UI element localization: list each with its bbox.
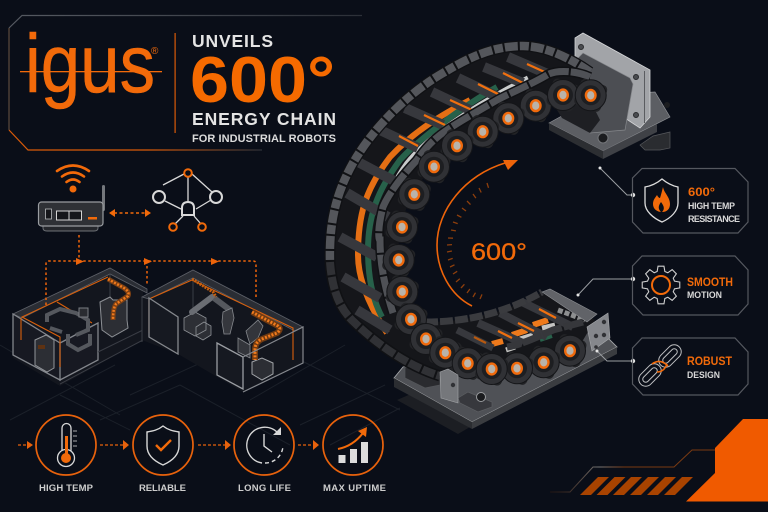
- corner accent: [550, 419, 768, 502]
- machine: right chain: [252, 312, 280, 360]
- panel: robust design: [632, 338, 748, 395]
- crossbar stripes: [399, 64, 556, 343]
- benefit: max uptime: MAX UPTIME: [323, 483, 386, 494]
- machine: robot cell: [47, 309, 90, 350]
- floor grid: [0, 345, 400, 445]
- panel text: ROBUST: [687, 354, 733, 368]
- header frame: [9, 16, 362, 150]
- connectors: [576, 166, 635, 363]
- panel text: RESISTANCE: [688, 214, 740, 224]
- circuit line: [550, 450, 715, 492]
- machine: robot arm one: [184, 312, 211, 340]
- side plates: [381, 77, 609, 387]
- benefit: high temp: HIGH TEMP: [39, 483, 94, 494]
- icon: network: [153, 169, 222, 231]
- icon: chain link: [636, 342, 684, 389]
- benefit: max uptime: [323, 415, 386, 494]
- igus logo: igus: [25, 17, 155, 110]
- gauge arc: [437, 160, 518, 306]
- benefits row: [18, 415, 386, 494]
- arrows: network distribution: [46, 235, 256, 305]
- icon: gear: [642, 266, 680, 304]
- headline: [190, 31, 336, 145]
- gauge ticks: [447, 183, 488, 299]
- benefit: long life: LONG LIFE: [238, 483, 291, 494]
- machine: gripper: [222, 308, 234, 334]
- chain end block: [542, 289, 610, 351]
- room: right: [142, 270, 303, 392]
- panel text: HIGH TEMP: [688, 201, 735, 211]
- panel text: DESIGN: [687, 370, 720, 381]
- header panel: [9, 16, 362, 150]
- panel text: [687, 275, 733, 301]
- rotation gauge: [437, 160, 527, 306]
- panel text: [687, 354, 733, 381]
- inner rim: [379, 71, 590, 347]
- headline: ENERGY CHAIN: [192, 109, 336, 129]
- machine: robot arm two: [238, 320, 263, 358]
- orange block: [686, 419, 768, 502]
- icon: wifi: [57, 166, 89, 192]
- icon: router: [38, 185, 105, 231]
- chain body: [330, 46, 595, 376]
- headline: UNVEILS: [192, 31, 273, 51]
- outer rail: [330, 46, 590, 376]
- igus logo: ®: [151, 46, 159, 57]
- benefit: reliable: RELIABLE: [139, 483, 186, 494]
- headline: 600°: [190, 43, 335, 116]
- arrow: router to network: [109, 209, 151, 217]
- factory floor plan: [13, 268, 303, 392]
- room: left: [13, 268, 147, 386]
- gauge label: 600°: [471, 239, 527, 266]
- benefit: reliable: [133, 415, 193, 494]
- header divider: [174, 33, 176, 133]
- panel text: 600°: [688, 185, 715, 199]
- arrows: benefits flow: [18, 440, 319, 450]
- panel text: MOTION: [687, 290, 722, 301]
- cables: [358, 78, 585, 350]
- panel: smooth motion: [632, 256, 748, 315]
- headline: FOR INDUSTRIAL ROBOTS: [192, 133, 336, 145]
- panel text: SMOOTH: [687, 275, 733, 289]
- icon: shield with flame: [645, 179, 678, 222]
- upright bracket: [440, 369, 492, 412]
- machine: robot with chain: [100, 297, 128, 337]
- hazard stripes: [580, 477, 693, 495]
- bottom bracket: [394, 320, 617, 434]
- top bracket: [549, 33, 670, 159]
- benefit: high temp: [36, 415, 96, 494]
- panel text: [688, 185, 740, 224]
- machine: cabinet: [35, 335, 54, 372]
- crossbars: [340, 57, 573, 348]
- energy chain: [330, 46, 610, 412]
- panel: high temp resistance: [632, 168, 748, 233]
- benefit: long life: [234, 415, 294, 494]
